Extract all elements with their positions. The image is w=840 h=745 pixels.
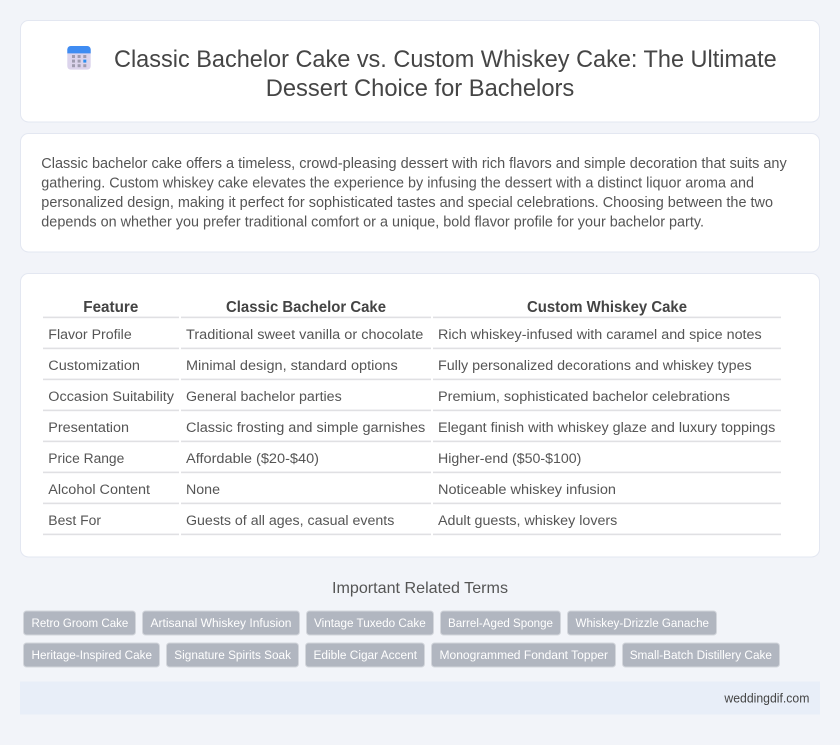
panel: intro text: personalized design, making it perfect for sophisticated tastes and special celebrations. Choosing between the two [41, 195, 773, 211]
table header: Custom Whiskey Cake [527, 299, 687, 316]
row: flavor profile [43, 327, 781, 349]
panel: intro text [20, 134, 820, 252]
row: alcohol content: Noticeable whiskey infusion [438, 482, 616, 498]
row: flavor profile: Traditional sweet vanilla or chocolate [186, 327, 423, 343]
row: customization: Customization [48, 358, 140, 374]
table header: Classic Bachelor Cake [226, 299, 386, 316]
tag: signature spirits soak [166, 643, 298, 667]
row: presentation [43, 420, 781, 442]
title: Dessert Choice for Bachelors [266, 75, 574, 102]
row: alcohol content [43, 482, 781, 504]
panel: intro text: Classic bachelor cake offers a timeless, crowd-pleasing dessert with rich flavors and simple decoration that suits any [41, 156, 788, 172]
row: flavor profile: Flavor Profile [48, 327, 132, 343]
tag: vintage tuxedo cake [306, 611, 434, 635]
row: presentation: Classic frosting and simple garnishes [186, 420, 425, 436]
tag: small-batch distillery cake [622, 643, 780, 667]
tag: retro groom cake [24, 611, 136, 635]
icon: calendar [67, 46, 91, 70]
tag: heritage-inspired cake [24, 643, 160, 667]
row: presentation: Elegant finish with whiskey glaze and luxury toppings [438, 420, 775, 436]
title [114, 46, 777, 102]
row: occasion suitability: Occasion Suitability [48, 389, 175, 405]
row: alcohol content: Alcohol Content [48, 482, 150, 498]
tag: signature spirits soak: Signature Spirits Soak [174, 648, 292, 662]
row: occasion suitability: Premium, sophisticated bachelor celebrations [438, 389, 730, 405]
tag: retro groom cake: Retro Groom Cake [32, 616, 129, 630]
row: best for [43, 513, 781, 535]
row: customization [43, 358, 781, 380]
row: occasion suitability [43, 389, 781, 411]
tag: barrel-aged sponge [440, 611, 560, 635]
row: price range: Affordable ($20-$40) [186, 451, 319, 467]
row: price range [43, 451, 781, 473]
tag: whiskey-drizzle ganache: Whiskey-Drizzle Ganache [576, 616, 709, 630]
row: presentation: Presentation [48, 420, 129, 436]
tag: small-batch distillery cake: Small-Batch Distillery Cake [630, 648, 772, 662]
row: occasion suitability: General bachelor parties [186, 389, 342, 405]
footer: weddingdif.com [723, 690, 809, 706]
row: flavor profile: Rich whiskey-infused with caramel and spice notes [438, 327, 762, 343]
heading: important related terms: Important Related Terms [332, 580, 508, 597]
tag: vintage tuxedo cake: Vintage Tuxedo Cake [314, 616, 426, 630]
panel: intro text: depends on whether you prefer traditional comfort or a unique, bold flavor profile for your bachelor party. [41, 214, 704, 230]
table header: Feature [83, 299, 138, 316]
related term tags [24, 611, 780, 667]
tag: barrel-aged sponge: Barrel-Aged Sponge [448, 616, 553, 630]
tag: monogrammed fondant topper [432, 643, 616, 667]
tag: artisanal whiskey infusion: Artisanal Whiskey Infusion [150, 616, 292, 630]
tag: edible cigar accent [306, 643, 424, 667]
table header [43, 299, 781, 318]
row: price range: Higher-end ($50-$100) [438, 451, 581, 467]
tag: whiskey-drizzle ganache [568, 611, 716, 635]
row: best for: Guests of all ages, casual events [186, 513, 394, 529]
tag: edible cigar accent: Edible Cigar Accent [314, 648, 418, 662]
row: price range: Price Range [48, 451, 124, 467]
tag: artisanal whiskey infusion [142, 611, 300, 635]
row: customization: Minimal design, standard options [186, 358, 398, 374]
row: best for: Adult guests, whiskey lovers [438, 513, 617, 529]
row: alcohol content: None [186, 482, 220, 498]
row: best for: Best For [48, 513, 101, 529]
tag: heritage-inspired cake: Heritage-Inspired Cake [32, 648, 152, 662]
panel: comparison table [20, 274, 820, 557]
row: customization: Fully personalized decorations and whiskey types [438, 358, 752, 374]
panel: title card [20, 20, 820, 122]
title: Classic Bachelor Cake vs. Custom Whiskey Cake: The Ultimate [114, 46, 777, 73]
panel: intro text: gathering. Custom whiskey cake elevates the experience by infusing the dessert with a distinct liquor aroma and [41, 176, 754, 192]
tag: monogrammed fondant topper: Monogrammed Fondant Topper [440, 648, 608, 662]
footer [20, 682, 820, 714]
